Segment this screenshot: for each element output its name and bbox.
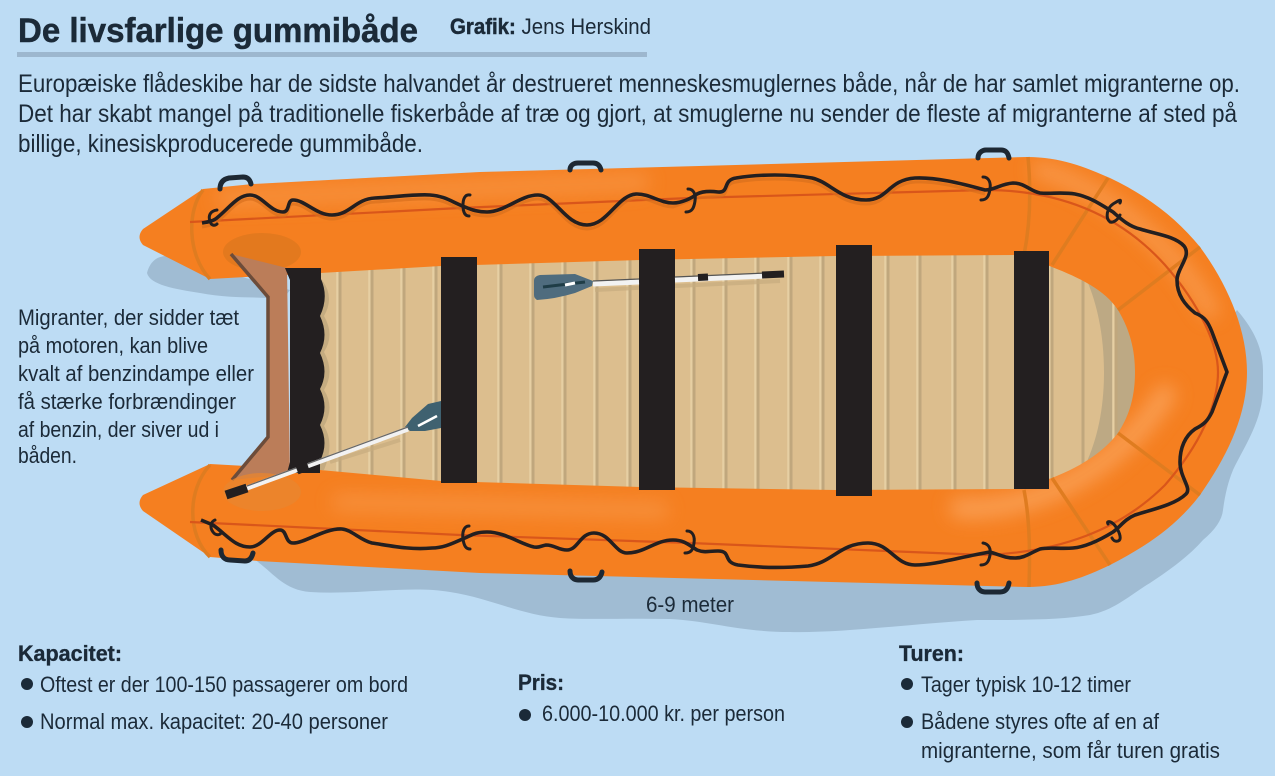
panel: capacity <box>18 641 408 734</box>
transom <box>231 254 290 480</box>
tube highlights <box>225 170 1210 510</box>
annotation: motor: af benzin, der siver ud i <box>18 417 219 442</box>
intro text: billige, kinesiskproducerede gummibåde. <box>18 130 423 158</box>
panel: the trip: Bådene styres ofte af en af <box>921 709 1160 734</box>
panel: capacity: Normal max. kapacitet: 20-40 personer <box>40 709 388 734</box>
panel: price <box>518 670 785 726</box>
annotation: motor: Migranter, der sidder tæt <box>18 305 240 330</box>
panel: price: Pris: <box>518 670 564 695</box>
red seam line <box>190 190 1218 555</box>
panel: the trip: migranterne, som får turen gratis <box>921 738 1220 763</box>
intro text <box>18 70 1240 158</box>
annotation: motor: få stærke forbrændinger <box>18 389 236 414</box>
motor mount ellipse bottom <box>223 473 301 511</box>
oar lower <box>226 401 441 495</box>
panel: the trip: Turen: <box>899 641 964 666</box>
black stern bar with scallops <box>285 268 330 473</box>
title: De livsfarlige gummibåde <box>18 12 418 50</box>
inflatable tube <box>140 157 1247 587</box>
annotation: motor: på motoren, kan blive <box>18 333 208 358</box>
rope shadow <box>202 179 985 229</box>
panel: price: 6.000-10.000 kr. per person <box>542 701 785 726</box>
byline: Grafik: Jens Herskind <box>450 14 651 39</box>
boat <box>140 150 1247 592</box>
oar shadows on floor <box>330 281 780 462</box>
tube seams <box>192 157 1200 587</box>
panel: the trip: Tager typisk 10-12 timer <box>921 672 1131 697</box>
grab handles <box>220 150 1009 592</box>
annotation: motor <box>18 305 254 468</box>
panel: capacity: Kapacitet: <box>18 641 122 666</box>
length label: 6-9 meter <box>646 592 734 617</box>
rope <box>201 175 1227 567</box>
annotation: motor: båden. <box>18 443 77 468</box>
floor <box>290 245 1145 498</box>
motor mount ellipse top <box>223 233 301 271</box>
panel: the trip <box>899 641 1220 763</box>
annotation: motor: kvalt af benzindampe eller <box>18 361 254 386</box>
oar upper <box>534 273 784 300</box>
thwarts <box>441 245 1049 496</box>
rope hooks <box>209 177 1121 565</box>
boat shadow on water <box>147 256 1263 632</box>
panel: capacity: Oftest er der 100-150 passagerer om bord <box>40 672 408 697</box>
